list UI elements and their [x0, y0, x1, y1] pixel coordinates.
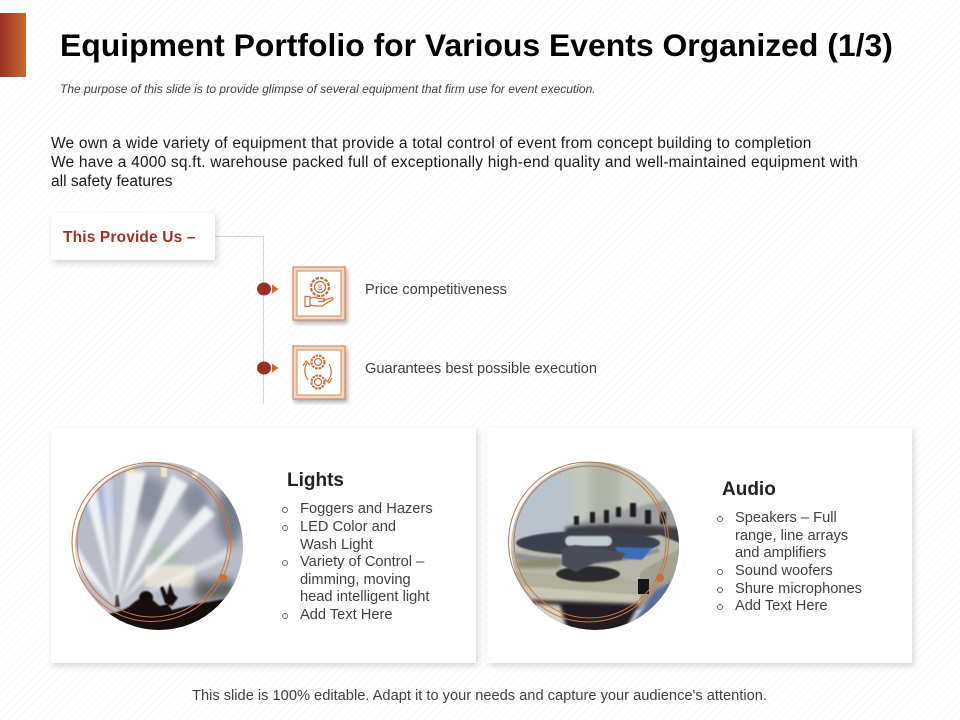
list: audio: Speakers – Full — [735, 510, 837, 526]
photo: turntable — [508, 462, 679, 630]
list: lights — [282, 501, 433, 623]
list: lights: Add Text Here — [300, 607, 393, 623]
photo: crowd under light beams — [72, 462, 243, 630]
label: best execution: Guarantees best possible execution — [365, 361, 597, 377]
list: lights: Foggers and Hazers — [300, 501, 433, 517]
icon: price competitiveness: $ — [318, 283, 323, 292]
heading: lights: Lights — [287, 470, 344, 491]
list: lights: LED Color and — [300, 519, 396, 535]
heading: audio: Audio — [722, 479, 776, 500]
title: Equipment Portfolio for Various Events Organized (1/3) — [60, 27, 893, 63]
list: lights: Wash Light — [300, 536, 373, 552]
intro text: We have a 4000 sq.ft. warehouse packed full of exceptionally high-end quality and well-maintained equipment with — [51, 154, 858, 171]
callout: this provide us — [51, 213, 215, 260]
accent bar — [0, 13, 26, 77]
list: lights: Variety of Control – — [300, 554, 424, 570]
list: audio: and amplifiers — [735, 545, 826, 561]
bullet marker 2 — [257, 362, 278, 374]
intro text — [51, 135, 858, 190]
intro text: We own a wide variety of equipment that provide a total control of event from concept building to completion — [51, 135, 812, 152]
list: audio: Shure microphones — [735, 581, 862, 597]
label: price competitiveness: Price competitiveness — [365, 282, 507, 298]
list: lights: dimming, moving — [300, 572, 411, 588]
icon: price competitiveness — [292, 266, 350, 326]
footer note: This slide is 100% editable. Adapt it to your needs and capture your audience's attention. — [192, 688, 767, 704]
list: audio: Add Text Here — [735, 598, 828, 614]
list: audio: range, line arrays — [735, 528, 848, 544]
list: lights: head intelligent light — [300, 589, 429, 605]
intro text: all safety features — [51, 173, 172, 190]
panel: lights — [51, 428, 476, 663]
list: audio — [717, 510, 862, 614]
bullet marker 1 — [257, 282, 278, 296]
list: audio: Sound woofers — [735, 563, 833, 579]
icon: execution gears — [292, 345, 350, 405]
callout: this provide us: This Provide Us – — [63, 229, 196, 246]
subtitle: The purpose of this slide is to provide glimpse of several equipment that firm use for event execution. — [60, 82, 596, 96]
panel: audio — [487, 428, 912, 663]
